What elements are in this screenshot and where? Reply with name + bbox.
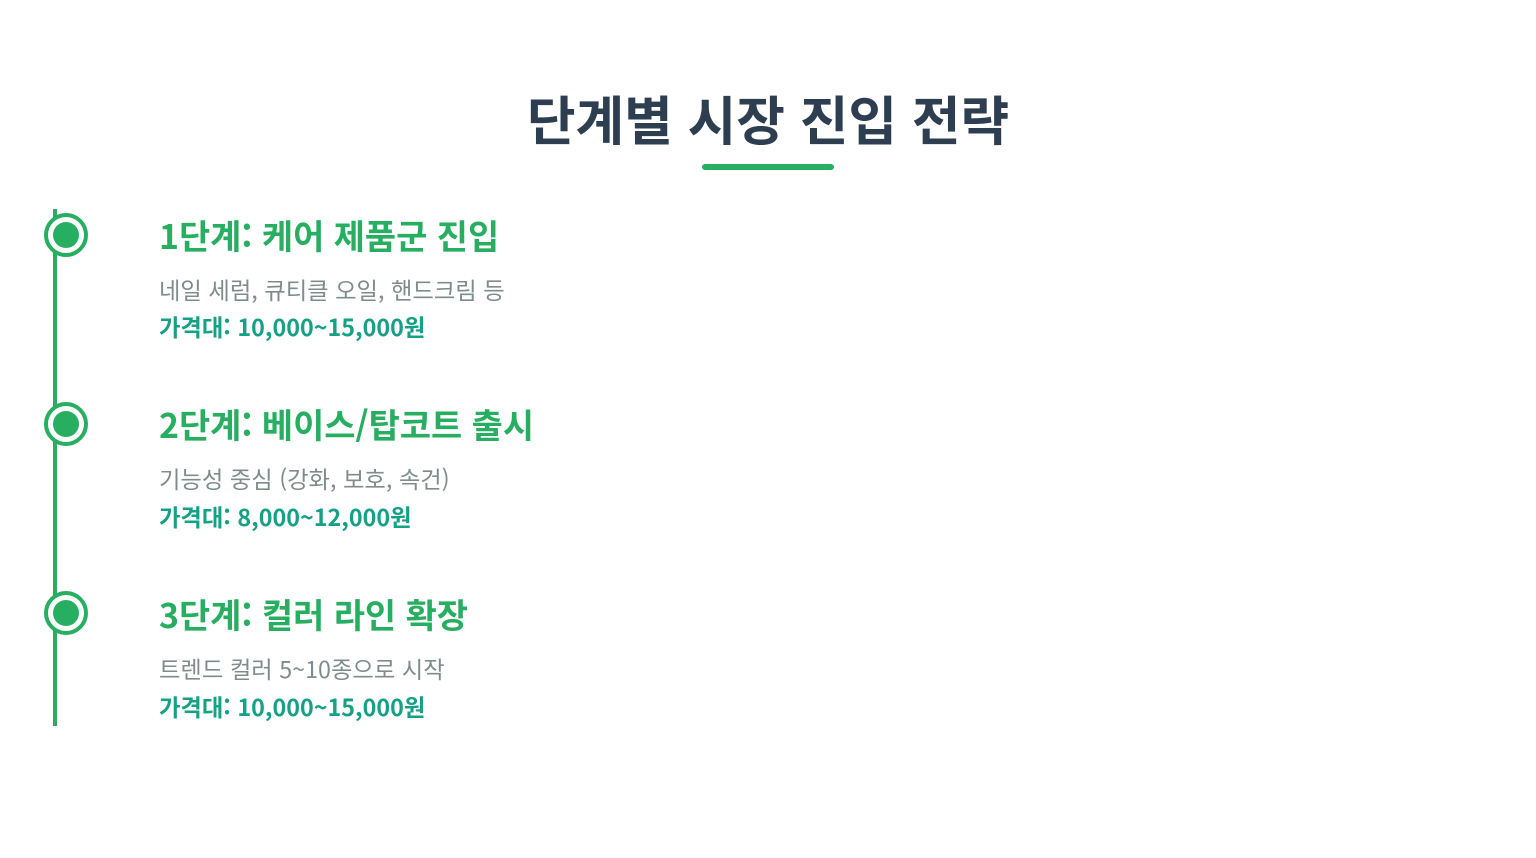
step 3 description: 트렌드 컬러 5~10종으로 시작 bbox=[159, 651, 445, 685]
step 1 marker bbox=[44, 213, 88, 257]
step 2 bbox=[44, 399, 534, 533]
step 1 description: 네일 세럼, 큐티클 오일, 핸드크림 등 bbox=[159, 272, 505, 306]
title: 단계별 시장 진입 전략 bbox=[527, 80, 1009, 156]
timeline line bbox=[53, 209, 57, 726]
step 3 marker bbox=[44, 591, 88, 635]
step 1 price: 가격대: 10,000~15,000원 bbox=[159, 309, 425, 343]
step 3 price: 가격대: 10,000~15,000원 bbox=[159, 689, 425, 723]
step 2 description: 기능성 중심 (강화, 보호, 속건) bbox=[159, 461, 450, 495]
step 3 bbox=[44, 589, 468, 723]
step 3 heading: 3단계: 컬러 라인 확장 bbox=[159, 589, 468, 638]
timeline bbox=[53, 209, 57, 726]
step 1 bbox=[44, 210, 505, 343]
step 2 price: 가격대: 8,000~12,000원 bbox=[159, 499, 412, 533]
step 2 heading: 2단계: 베이스/탑코트 출시 bbox=[159, 399, 534, 448]
step 2 marker bbox=[44, 402, 88, 446]
title underline bbox=[702, 164, 834, 170]
step 1 heading: 1단계: 케어 제품군 진입 bbox=[159, 210, 499, 259]
